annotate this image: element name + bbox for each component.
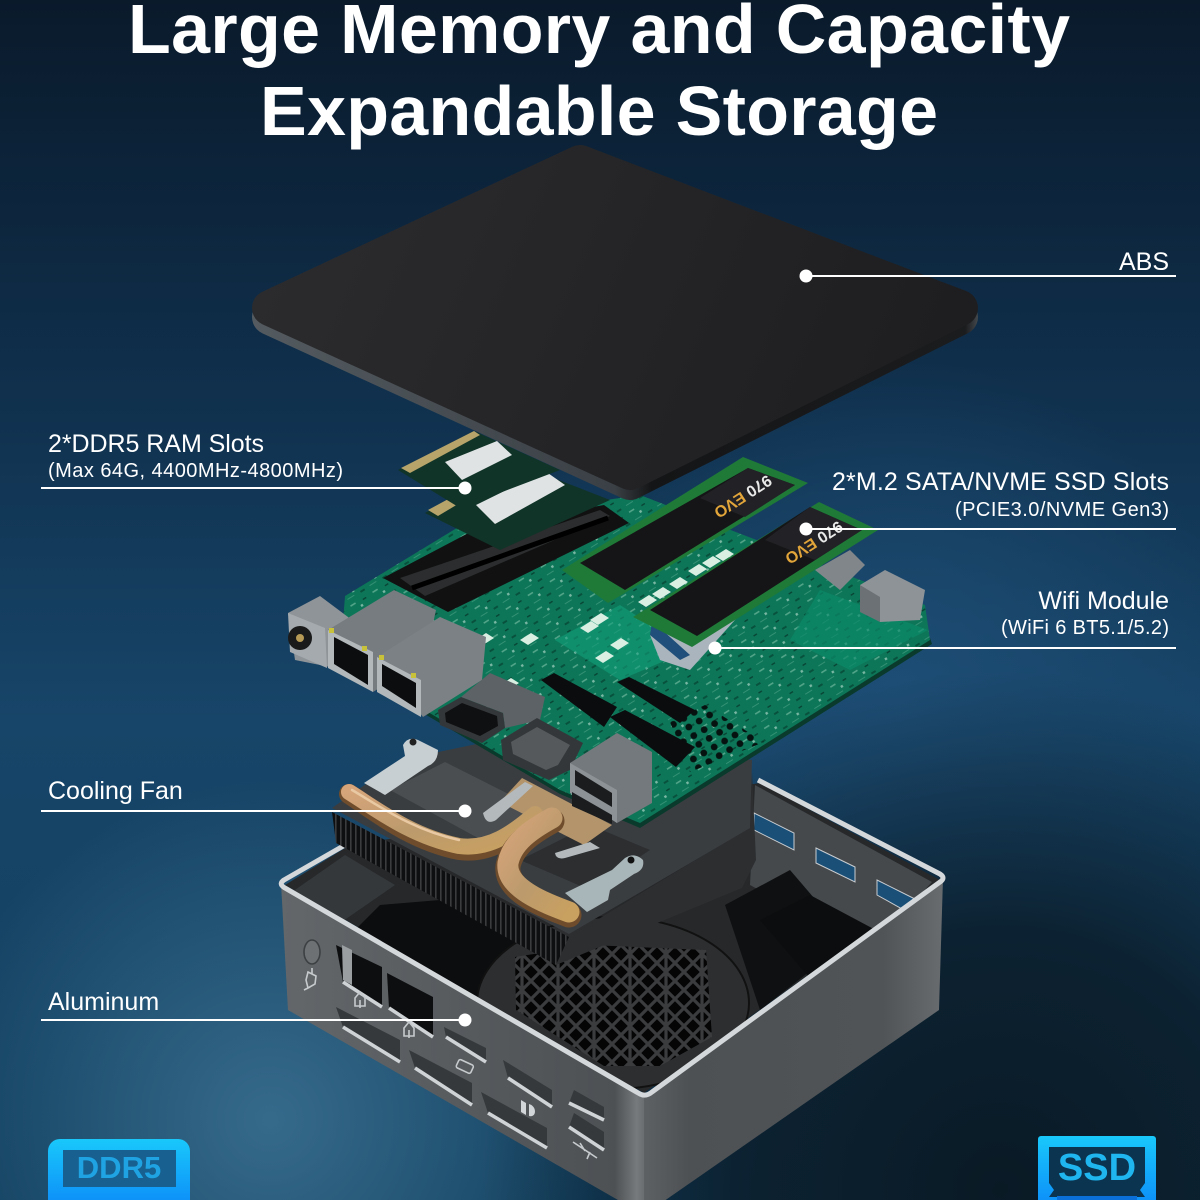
label: wifi module: (WiFi 6 BT5.1/5.2) [1001,617,1169,639]
fan body [556,772,756,965]
badge: DDR5: DDR5 [77,1150,161,1185]
abs top plate [270,163,960,482]
cooling fan heatsink [332,735,756,965]
dc jack [288,596,352,668]
bracket two [565,855,643,912]
case interior floor [285,783,940,1093]
label: RAM slots: 2*DDR5 RAM Slots [48,430,264,458]
badge: SSD: SSD [1058,1147,1136,1189]
ssd two: 970 EVO [782,517,845,567]
usb port right [815,550,925,622]
usb stack [570,733,652,824]
port icons [304,940,597,1159]
ssd one [562,457,808,603]
label: RAM slots: (Max 64G, 4400MHz-4800MHz) [48,460,343,482]
badge: DDR5 [48,1139,190,1200]
label: SSD slots: (PCIE3.0/NVME Gen3) [955,499,1169,521]
fan ring [477,917,749,1089]
badge: SSD [1038,1136,1156,1200]
perforated area [670,705,764,772]
port cutouts [336,1007,604,1150]
bracket one [364,739,438,795]
ssd one: 970 EVO [711,471,774,521]
aluminum case [281,780,943,1200]
port cutout highlights [343,982,604,1150]
label: SSD slots: 2*M.2 SATA/NVME SSD Slots [832,468,1169,496]
hdmi port [438,673,545,743]
case rim [281,780,943,1095]
title [128,0,1070,150]
ethernet port one [328,590,436,692]
label: aluminum: Aluminum [48,988,159,1016]
flat copper plate [500,778,612,845]
white pads [475,549,734,690]
ssd two [633,502,878,647]
title: Expandable Storage [260,72,938,150]
plate edge [270,172,960,482]
inner back wall with windows [292,785,932,1010]
label: wifi module: Wifi Module [1038,587,1169,615]
cooling fins [332,812,569,965]
mini slots [541,673,695,767]
label: wifi module [708,587,1176,654]
recess strips [390,762,560,850]
displayport [501,718,583,780]
left front wall [281,883,644,1200]
small screw tabs [483,782,533,822]
label: ABS [800,248,1176,282]
right wall [644,878,943,1200]
ram slots [383,505,629,612]
label: SSD slots [800,468,1176,536]
lighter pcb areas [555,605,690,680]
fan grille [515,945,712,1066]
ethernet port two [377,617,486,717]
ram modules [398,431,610,550]
plate surface [270,163,960,472]
motherboard [288,431,932,828]
label: aluminum [41,988,472,1026]
label: cooling fan: Cooling Fan [48,777,183,805]
heatsink top [332,735,752,934]
pcb edge [340,638,932,828]
label: RAM slots [41,430,472,494]
ram one [398,431,560,508]
pcb [340,495,930,823]
ethernet cutouts [336,945,433,1037]
label: ABS: ABS [1119,248,1169,276]
heat pipe one [349,790,535,851]
heat pipe two [508,818,569,915]
ram two [425,463,610,550]
wifi module [650,580,768,670]
label: cooling fan [41,777,472,818]
